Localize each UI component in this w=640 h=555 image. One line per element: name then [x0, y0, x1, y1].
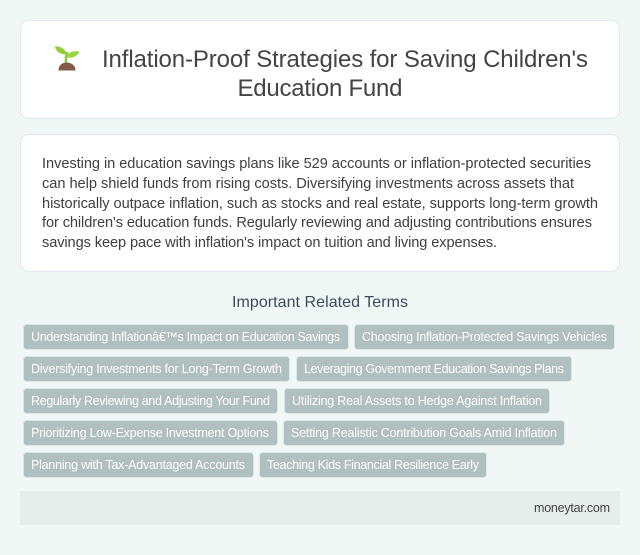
tag text: Understanding Inflationâ€™s Impact on Education Savings — [31, 330, 340, 344]
text: description paragraph: can help shield funds from rising costs. Diversifying investments across assets that — [42, 176, 574, 192]
tag text: Setting Realistic Contribution Goals Amid Inflation — [291, 426, 557, 440]
title: Inflation-Proof Strategies for Saving Children's — [102, 46, 588, 73]
panel: title card — [20, 20, 620, 118]
tag text: Prioritizing Low-Expense Investment Options — [31, 426, 269, 440]
text: description paragraph: savings keep pace with inflation's impact on tuition and living expenses. — [42, 235, 497, 251]
panel: description — [20, 134, 620, 272]
tag text: Diversifying Investments for Long-Term Growth — [31, 362, 282, 376]
tag text: Choosing Inflation-Protected Savings Vehicles — [362, 330, 607, 344]
tag text: Regularly Reviewing and Adjusting Your Fund — [31, 394, 270, 408]
footer source: moneytar.com — [534, 501, 610, 515]
panel: related terms tags — [24, 324, 614, 478]
tag text: Utilizing Real Assets to Hedge Against Inflation — [292, 394, 542, 408]
text: description paragraph: for children's education funds. Regularly reviewing and adjusting contributions ensures — [42, 215, 592, 231]
text: description paragraph: historically outpace inflation, such as stocks and real estate, supports long-term growth — [42, 196, 598, 212]
icon: seedling — [55, 46, 80, 70]
tag text: Teaching Kids Financial Resilience Early — [267, 458, 480, 472]
tag text — [31, 330, 607, 472]
tag text: Planning with Tax-Advantaged Accounts — [31, 458, 245, 472]
footer — [20, 491, 620, 525]
heading: important related terms: Important Related Terms — [232, 294, 408, 311]
text: description paragraph: Investing in education savings plans like 529 accounts or inflation-protected securities — [42, 156, 591, 172]
title: Education Fund — [238, 75, 402, 102]
tag text: Leveraging Government Education Savings Plans — [304, 362, 564, 376]
